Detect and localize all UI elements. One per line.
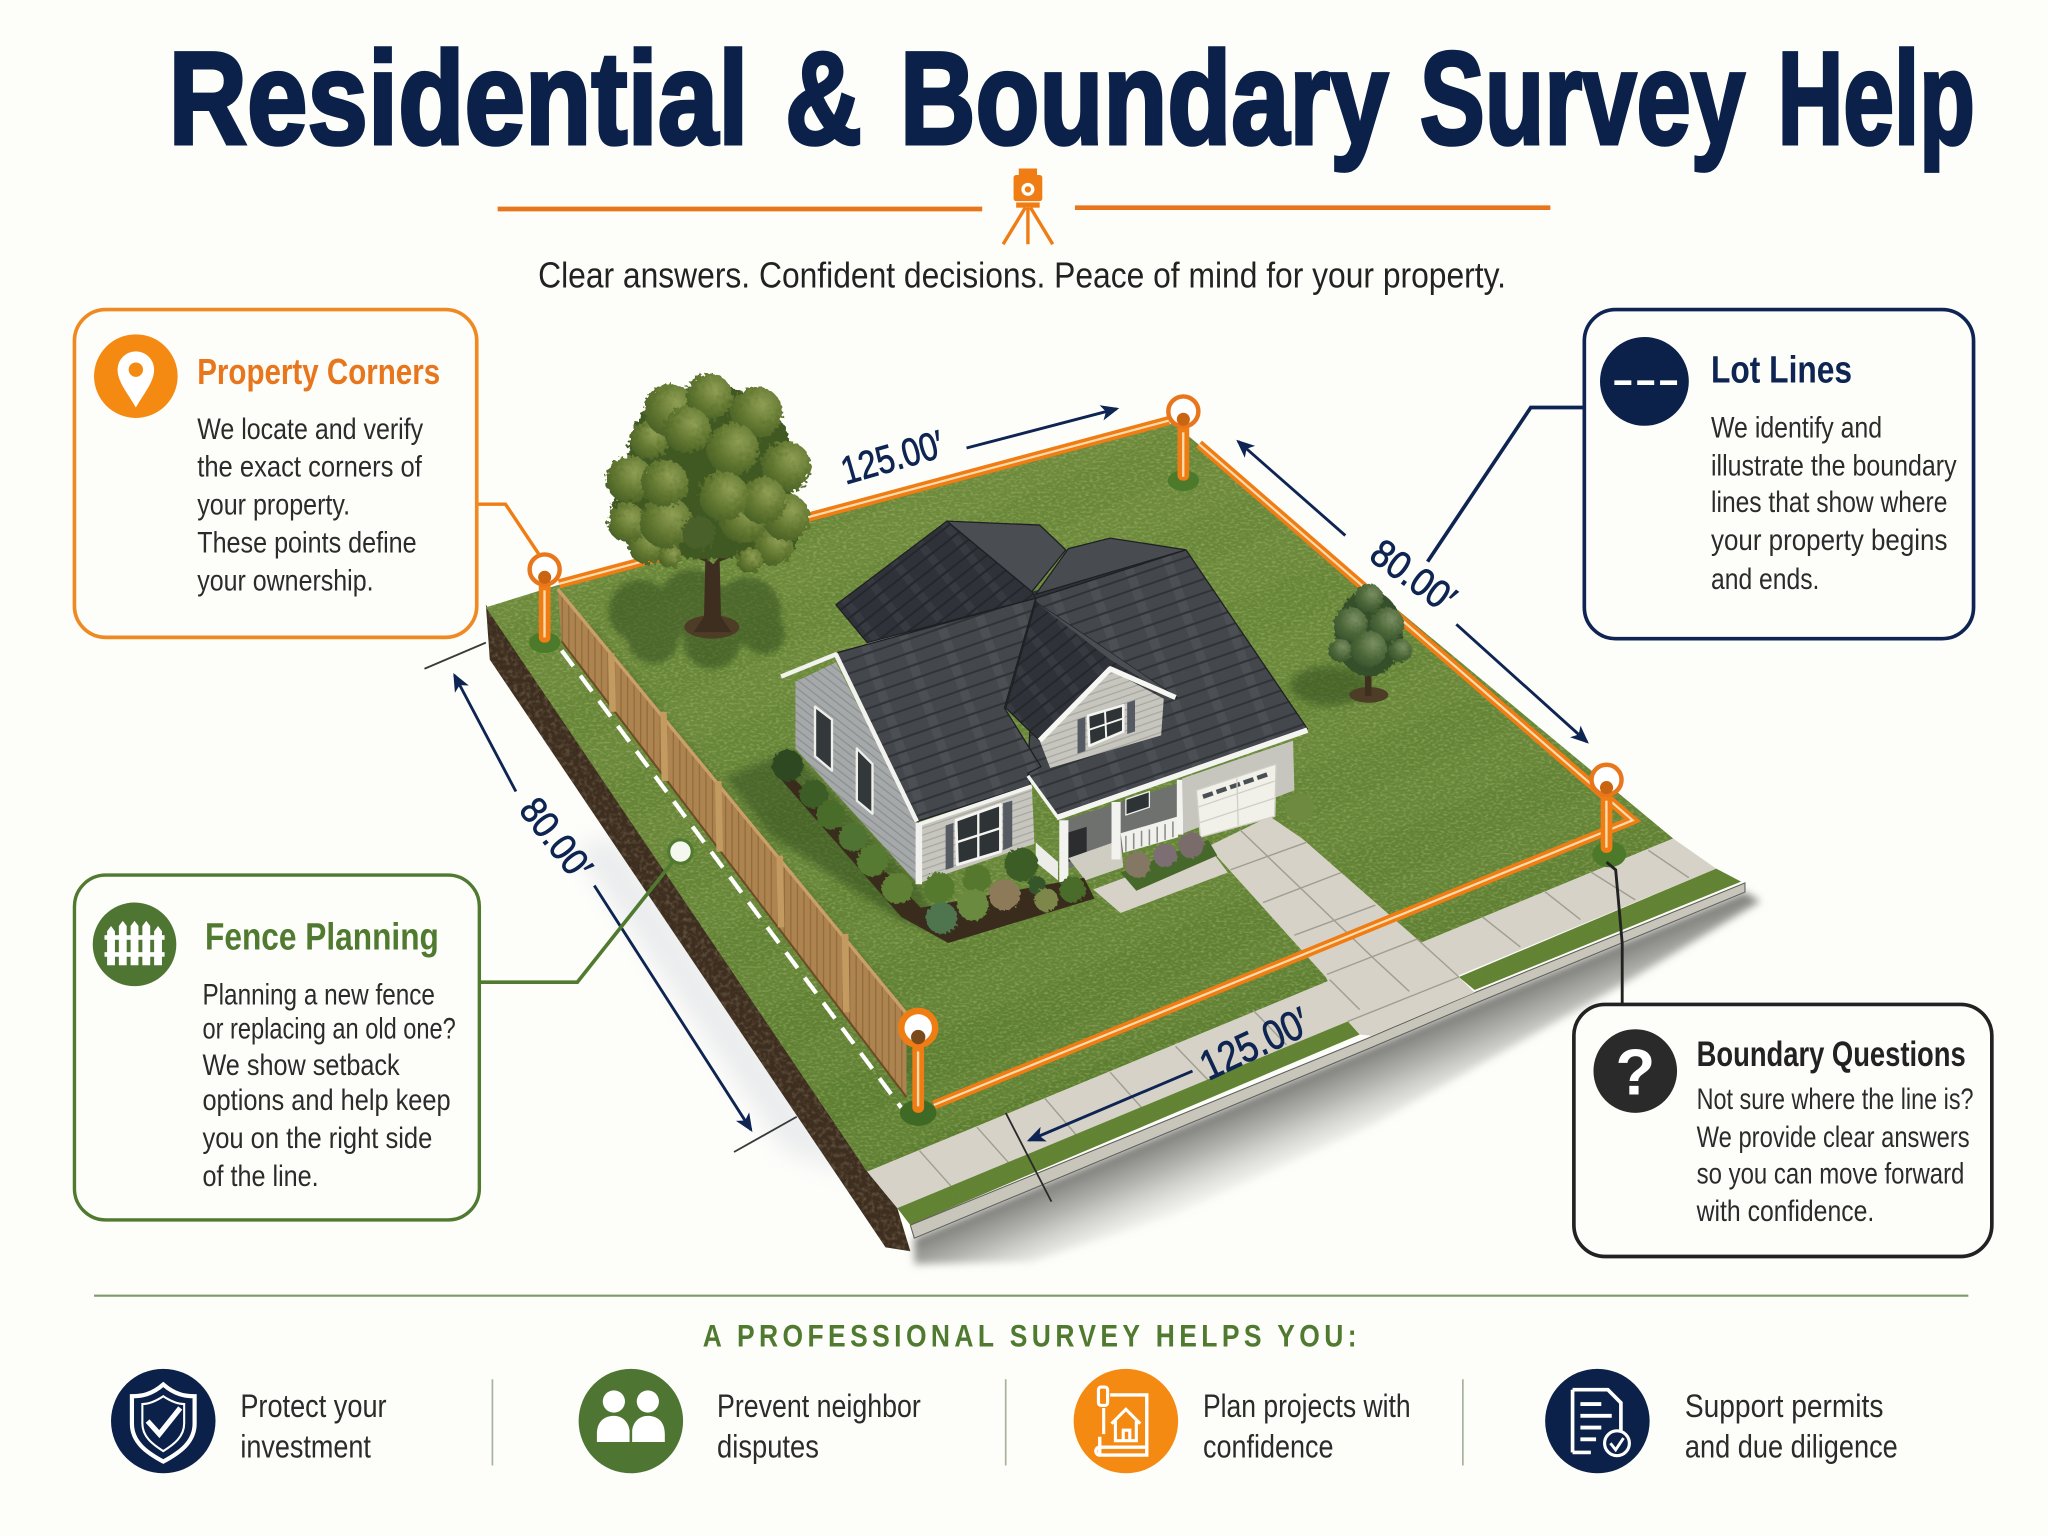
heading: Boundary Questions <box>1697 1035 1966 1074</box>
driveway walk <box>1093 816 1475 1036</box>
benefit: prevent disputes <box>579 1369 921 1473</box>
description: and ends. <box>1711 563 1819 596</box>
shadows on lawn <box>572 569 1369 1091</box>
garage wall and door <box>1182 741 1294 837</box>
bottom section <box>94 1296 1968 1473</box>
panel: boundary questions <box>1574 862 1992 1256</box>
dashed boundary line <box>562 650 901 1108</box>
panel: property corners <box>74 310 539 637</box>
heading: Lot Lines <box>1711 350 1852 392</box>
description: your property. <box>197 489 350 522</box>
description: Not sure where the line is? <box>1697 1083 1974 1116</box>
benefit: protect investment: Protect your <box>240 1387 387 1424</box>
description: Planning a new fence <box>202 978 435 1011</box>
dimension: bottom 125.00: 125.00′ <box>1192 998 1316 1089</box>
description: so you can move forward <box>1697 1157 1964 1190</box>
mulch and shrubs <box>772 750 1314 943</box>
left side wall <box>795 662 917 883</box>
description: of the line. <box>202 1160 319 1193</box>
dimension: right 80.00 <box>1238 441 1587 742</box>
street grass strip <box>895 862 1744 1228</box>
description <box>202 978 456 1193</box>
section heading: A PROFESSIONAL SURVEY HELPS YOU: <box>703 1319 1361 1354</box>
sidewalk <box>867 839 1716 1208</box>
large tree <box>606 374 811 639</box>
title <box>168 25 1975 172</box>
title: Survey <box>1420 25 1745 172</box>
description: with confidence. <box>1696 1195 1874 1228</box>
benefit: protect investment: investment <box>240 1428 371 1465</box>
title: Residential <box>168 25 748 172</box>
dimension: left 80.00 <box>424 643 797 1152</box>
description: We identify and <box>1711 412 1882 445</box>
description: illustrate the boundary <box>1711 449 1957 482</box>
dimension: top 125.00: 125.00′ <box>836 423 949 493</box>
benefit: prevent disputes: disputes <box>717 1428 819 1465</box>
house <box>781 521 1307 884</box>
property illustration <box>424 374 1761 1264</box>
description: your ownership. <box>197 564 374 597</box>
description <box>1711 412 1957 596</box>
lawn <box>483 418 1685 1176</box>
small tree <box>1328 584 1412 703</box>
heading: Property Corners <box>197 351 440 392</box>
icon: question mark: ? <box>1615 1036 1655 1109</box>
description <box>197 413 423 597</box>
road shadow and street <box>575 836 1761 1264</box>
orange boundary lines <box>559 421 1633 1105</box>
dimension: left 80.00: 80.00′ <box>511 790 600 888</box>
description: lines that show where <box>1711 486 1947 519</box>
title: & <box>785 25 862 172</box>
title: Boundary <box>900 25 1388 172</box>
survey pin: left corner <box>529 554 560 653</box>
benefit: support permits: Support permits <box>1685 1387 1883 1424</box>
description: These points define <box>197 526 417 559</box>
icon: dashed line <box>1600 337 1689 426</box>
roof <box>836 521 1307 815</box>
heading: Fence Planning <box>205 917 439 959</box>
benefit: support permits <box>1545 1369 1898 1473</box>
benefit: plan projects: Plan projects with <box>1203 1387 1411 1424</box>
dimension: top 125.00 <box>836 409 1117 493</box>
description: We locate and verify <box>197 413 423 446</box>
survey pin: right corner <box>1592 765 1626 867</box>
description <box>1696 1083 1974 1228</box>
left windows <box>815 707 872 814</box>
front wall <box>920 786 1034 883</box>
soil edge <box>483 601 914 1254</box>
benefit: prevent disputes: Prevent neighbor <box>717 1387 921 1424</box>
panel: lot lines <box>1428 310 1974 639</box>
icon: fence <box>93 903 176 986</box>
benefit: plan projects: confidence <box>1203 1428 1334 1465</box>
icon: question mark <box>1593 1029 1677 1113</box>
icon: map pin <box>94 334 178 418</box>
description: the exact corners of <box>197 451 422 484</box>
description: We show setback <box>202 1049 400 1082</box>
front window <box>946 801 1012 870</box>
description: your property begins <box>1711 524 1947 557</box>
description: or replacing an old one? <box>202 1012 456 1045</box>
left roof <box>836 598 1041 822</box>
dormer <box>1006 602 1177 768</box>
description: options and help keep <box>202 1084 451 1117</box>
description: We provide clear answers <box>1697 1121 1970 1154</box>
benefit: support permits: and due diligence <box>1685 1428 1898 1465</box>
title divider with surveyor tripod icon <box>498 168 1550 244</box>
fascia <box>1057 730 1307 818</box>
description: you on the right side <box>202 1122 432 1155</box>
gable fascia <box>781 654 917 822</box>
survey pin: bottom corner <box>900 1011 936 1126</box>
panel: fence planning <box>74 840 692 1220</box>
dimension: bottom 125.00 <box>1006 998 1316 1202</box>
dimension: right 80.00: 80.00′ <box>1362 531 1463 621</box>
subtitle: Clear answers. Confident decisions. Peace of mind for your property. <box>538 254 1506 295</box>
porch <box>1036 780 1183 883</box>
survey pin: top corner <box>1168 396 1199 491</box>
benefit: plan projects <box>1074 1369 1411 1473</box>
curb <box>910 883 1745 1238</box>
benefit: protect investment <box>111 1369 387 1473</box>
wood fence <box>558 589 906 1097</box>
